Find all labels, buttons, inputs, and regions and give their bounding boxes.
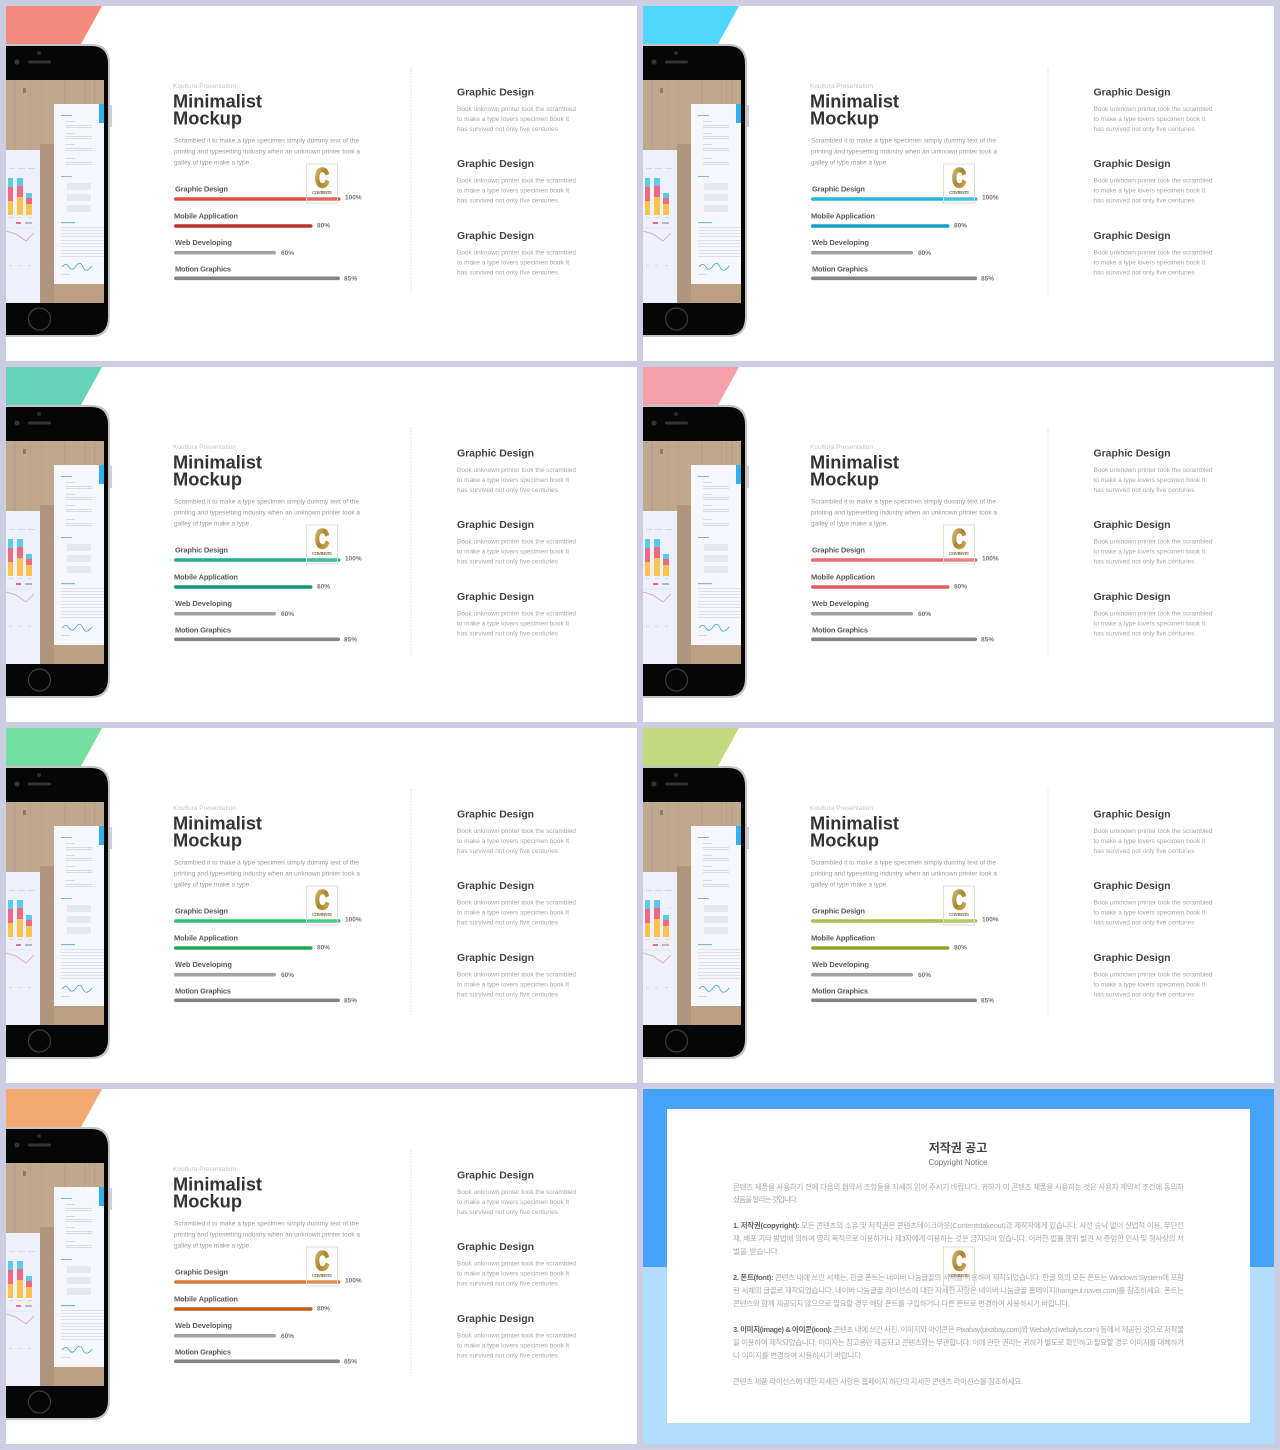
feature list: to make a type lovers specimen book It [457, 910, 569, 916]
watermark badge: C [315, 885, 329, 915]
watermark badge: CONTENTS [949, 551, 969, 556]
heading block: Mockup [173, 470, 242, 490]
notice body: 1. 저작권(copyright): 모든 콘텐츠의 소유 및 저작권은 콘텐츠테이크아웃(Contentstakeout)과 제작자에게 있습니다. 사전 승낙 없이 상업적 이용, 무단전 [733, 1220, 1184, 1230]
skill bars: 100% [345, 556, 362, 563]
intro paragraph: Scrambled it to make a type specimen simply dummy text of the [174, 860, 359, 867]
heading block [173, 1166, 262, 1212]
feature list: has survived not only five centuries [1094, 920, 1195, 926]
skill bars: 60% [918, 972, 931, 979]
heading block: Mockup [173, 1192, 242, 1212]
skill bars: 100% [982, 195, 999, 202]
divider [410, 67, 412, 293]
feature list: Book unknown printer took the scrambled [457, 900, 576, 906]
watermark badge [944, 163, 974, 203]
watermark badge: CONTENTS [312, 551, 332, 556]
feature list: Graphic Design [457, 808, 534, 820]
intro paragraph: printing and typesetting industry when an unknown printer took a [174, 149, 360, 156]
skill bars: Mobile Application [174, 211, 238, 220]
feature list [457, 86, 576, 276]
watermark badge: CONTENTS [312, 190, 332, 195]
skill bars: 80% [954, 223, 967, 230]
intro paragraph [811, 138, 997, 167]
watermark badge: CONTENTS [312, 912, 332, 917]
watermark badge: C [315, 163, 329, 193]
feature list: Book unknown printer took the scrambled [457, 972, 576, 978]
heading block: Koultura Presentation [173, 83, 236, 90]
panel: teal mockup slide [6, 367, 637, 722]
feature list: has survived not only five centuries [457, 487, 559, 494]
skill bars: Graphic Design [175, 1268, 228, 1277]
skill bars: Mobile Application [811, 933, 875, 942]
watermark badge [306, 885, 338, 925]
intro paragraph: galley of type make a type. [811, 521, 888, 528]
white notice card [667, 1109, 1250, 1423]
corner accent: lime [643, 728, 739, 766]
feature list: Book unknown printer took the scrambled [457, 1260, 576, 1268]
skill bars [174, 185, 362, 282]
intro paragraph [811, 860, 997, 889]
feature list: to make a type lovers specimen book It [457, 982, 569, 988]
divider [410, 428, 412, 654]
feature list: Graphic Design [457, 591, 534, 603]
feature list: has survived not only five centuries [1094, 848, 1195, 855]
feature list: Book unknown printer took the scrambled [457, 467, 576, 474]
feature list: Graphic Design [457, 86, 534, 98]
notice body: 3. 이미지(image) & 아이콘(icon): 콘텐츠 내에 쓰인 사진, 이미지와 아이콘은 Pixabay(pixabay.com)와 Webalys(webalys.com) 등에서 제공된 것으로 저작물 [733, 1324, 1184, 1334]
skill bars: Motion Graphics [175, 626, 231, 635]
skill bars: 85% [981, 276, 994, 282]
panel: red mockup slide [6, 6, 637, 361]
feature list [1094, 808, 1213, 998]
heading block [173, 444, 262, 490]
skill bars: Web Developing [175, 960, 232, 969]
heading block [810, 444, 899, 490]
intro paragraph [174, 138, 360, 167]
skill bars: Web Developing [175, 1321, 232, 1330]
watermark badge: CONTENTS [312, 1273, 332, 1278]
divider [1047, 789, 1049, 1015]
heading block: Koultura Presentation [810, 83, 873, 90]
feature list: Graphic Design [457, 880, 534, 892]
feature list: to make a type lovers specimen book It [457, 1199, 569, 1206]
feature list: to make a type lovers specimen book It [457, 620, 569, 628]
intro paragraph: printing and typesetting industry when an unknown printer took a [811, 149, 997, 156]
skill bars: 85% [344, 1358, 357, 1366]
notice body: 나 이미지를 변경하여 사용하시기 바랍니다. [733, 1350, 863, 1360]
intro paragraph [174, 860, 360, 889]
feature list: Book unknown printer took the scrambled [1094, 828, 1213, 835]
intro paragraph [811, 499, 997, 528]
divider [410, 1150, 412, 1376]
skill bars: 100% [345, 917, 362, 924]
skill bars: Mobile Application [174, 933, 238, 942]
skill bars: Web Developing [812, 599, 869, 608]
skill bars: Motion Graphics [175, 1348, 231, 1357]
phone mockup [6, 405, 112, 698]
skill bars [174, 1268, 362, 1366]
skill bars [811, 185, 999, 282]
heading block: Koultura Presentation [173, 1166, 236, 1173]
skill bars: 80% [317, 945, 330, 952]
skill bars: Mobile Application [811, 211, 875, 220]
feature list: has survived not only five centuries [1094, 198, 1195, 204]
skill bars: 100% [345, 195, 362, 202]
feature list: to make a type lovers specimen book It [1094, 260, 1206, 266]
intro paragraph: printing and typesetting industry when an unknown printer took a [174, 871, 360, 878]
skill bars: Motion Graphics [812, 626, 868, 635]
feature list: Graphic Design [1094, 952, 1170, 964]
watermark badge: C [315, 1246, 329, 1276]
heading block: Mockup [810, 108, 879, 128]
corner accent: green [6, 728, 102, 766]
watermark badge [944, 1246, 974, 1286]
notice body: 을 이용하여 제작되었습니다. 이미지는 참고용만 제공되고 콘텐츠와는 무관합니다. 이에 관한 권리는 귀하가 별도로 확인하고 필요할 경우 이미지를 대체하거 [733, 1337, 1184, 1347]
divider [1047, 428, 1049, 654]
feature list: to make a type lovers specimen book It [457, 260, 569, 266]
feature list: has survived not only five centuries [1094, 126, 1195, 133]
intro paragraph: printing and typesetting industry when an unknown printer took a [174, 1232, 360, 1239]
feature list: Book unknown printer took the scrambled [457, 1332, 576, 1340]
skill bars: 60% [918, 611, 931, 618]
divider [410, 789, 412, 1015]
feature list: Graphic Design [1094, 447, 1170, 459]
feature list: to make a type lovers specimen book It [1094, 188, 1206, 194]
feature list: to make a type lovers specimen book It [457, 116, 569, 123]
skill bars: 100% [345, 1278, 362, 1285]
skill bars: Graphic Design [175, 546, 228, 555]
skill bars: 80% [317, 1306, 330, 1313]
feature list: Graphic Design [1094, 880, 1170, 892]
intro paragraph: Scrambled it to make a type specimen simply dummy text of the [174, 138, 359, 145]
skill bars: Mobile Application [174, 572, 238, 581]
watermark badge: CONTENTS [949, 190, 969, 195]
feature list: Book unknown printer took the scrambled [1094, 538, 1213, 546]
heading block: Mockup [810, 470, 879, 490]
skill bars: 85% [344, 998, 357, 1004]
feature list: to make a type lovers specimen book It [1094, 548, 1206, 556]
watermark badge: CONTENTS [949, 912, 969, 917]
feature list: has survived not only five centuries [457, 920, 559, 926]
feature list [1094, 447, 1213, 638]
feature list: to make a type lovers specimen book It [1094, 116, 1206, 123]
feature list: Graphic Design [457, 952, 534, 964]
notice title: Copyright Notice [928, 1158, 988, 1167]
feature list: Graphic Design [457, 230, 534, 242]
skill bars: 60% [281, 611, 294, 618]
feature list: Book unknown printer took the scrambled [1094, 972, 1213, 978]
corner accent: pink [643, 367, 739, 405]
skill bars: 60% [281, 250, 294, 257]
feature list: has survived not only five centuries [1094, 558, 1195, 566]
heading block: Koultura Presentation [810, 805, 873, 812]
heading block [173, 805, 262, 850]
skill bars: Mobile Application [174, 1294, 238, 1303]
feature list: has survived not only five centuries [457, 1352, 559, 1360]
feature list: to make a type lovers specimen book It [1094, 910, 1206, 916]
feature list: Graphic Design [457, 519, 534, 531]
feature list: to make a type lovers specimen book It [457, 1342, 569, 1350]
notice body [733, 1182, 1184, 1386]
heading block: Minimalist [173, 452, 262, 472]
intro paragraph: Scrambled it to make a type specimen simply dummy text of the [811, 499, 996, 506]
watermark badge: C [315, 524, 329, 554]
feature list: Graphic Design [457, 1169, 534, 1181]
heading block: Mockup [810, 830, 879, 850]
intro paragraph: galley of type make a type. [174, 1243, 251, 1250]
intro paragraph: Scrambled it to make a type specimen simply dummy text of the [811, 138, 996, 145]
watermark badge [944, 885, 974, 925]
intro paragraph: galley of type make a type. [174, 521, 251, 528]
feature list: Book unknown printer took the scrambled [1094, 467, 1213, 474]
feature list: Book unknown printer took the scrambled [1094, 106, 1213, 113]
notice body: 2. 폰트(font): 콘텐츠 내에 쓰인 서체는, 한글 폰트는 네이버 나눔글꼴의 서체를 사용하여 제작되었습니다. 한글 외의 모든 폰트는 Windows System에 포함 [733, 1272, 1184, 1282]
heading block: Koultura Presentation [810, 444, 873, 451]
intro paragraph: Scrambled it to make a type specimen simply dummy text of the [811, 860, 996, 867]
feature list: has survived not only five centuries [457, 270, 559, 276]
panel: orange mockup slide [6, 1089, 637, 1444]
watermark badge [306, 524, 338, 564]
feature list: to make a type lovers specimen book It [457, 477, 569, 484]
skill bars [811, 907, 999, 1004]
watermark badge [306, 1246, 338, 1286]
skill bars [174, 546, 362, 644]
feature list: to make a type lovers specimen book It [1094, 620, 1206, 628]
watermark badge: CONTENTS [949, 1273, 969, 1278]
feature list: Graphic Design [457, 447, 534, 459]
feature list: has survived not only five centuries [457, 126, 559, 133]
skill bars [174, 907, 362, 1004]
notice body: 셨음을 알리는 것입니다. [733, 1194, 798, 1204]
skill bars: Web Developing [812, 238, 869, 247]
phone mockup [643, 766, 749, 1059]
intro paragraph: printing and typesetting industry when an unknown printer took a [811, 871, 997, 878]
skill bars: Motion Graphics [175, 987, 231, 996]
skill bars: 85% [344, 276, 357, 282]
feature list: has survived not only five centuries [457, 1280, 559, 1288]
skill bars: 100% [982, 917, 999, 924]
intro paragraph: galley of type make a type. [811, 882, 888, 889]
corner accent: cyan [643, 6, 739, 44]
feature list: has survived not only five centuries [1094, 992, 1195, 998]
notice title: 저작권 공고 [929, 1140, 987, 1155]
skill bars: 80% [954, 584, 967, 591]
feature list: Graphic Design [457, 1313, 534, 1325]
feature list [457, 447, 576, 638]
heading block [810, 805, 899, 850]
corner accent: orange [6, 1089, 102, 1127]
skill bars: 60% [918, 250, 931, 257]
skill bars: 80% [317, 584, 330, 591]
feature list: Graphic Design [457, 158, 534, 170]
watermark badge: C [952, 163, 966, 193]
phone mockup [643, 405, 749, 698]
panel: pink mockup slide [643, 367, 1274, 722]
heading block: Koultura Presentation [173, 444, 236, 451]
heading block: Minimalist [810, 92, 899, 112]
feature list: to make a type lovers specimen book It [1094, 838, 1206, 845]
skill bars: Motion Graphics [175, 265, 231, 274]
skill bars: 85% [981, 998, 994, 1004]
feature list: has survived not only five centuries [457, 1209, 559, 1216]
skill bars: 80% [954, 945, 967, 952]
skill bars [811, 546, 999, 644]
feature list: to make a type lovers specimen book It [457, 1270, 569, 1278]
skill bars: 60% [281, 972, 294, 979]
watermark badge: C [952, 524, 966, 554]
corner accent: red [6, 6, 102, 44]
heading block: Minimalist [810, 452, 899, 472]
feature list: has survived not only five centuries [457, 630, 559, 638]
intro paragraph [174, 1221, 360, 1250]
panel: green mockup slide [6, 728, 637, 1083]
feature list: has survived not only five centuries [1094, 630, 1195, 638]
skill bars: 60% [281, 1333, 294, 1340]
feature list [1094, 86, 1213, 276]
feature list: Book unknown printer took the scrambled [457, 106, 576, 113]
notice body: 콘텐츠 제품을 사용하기 전에 다음의 협약서 조항들을 자세히 읽어 주시기 바랍니다. 귀하가 이 콘텐츠 제품을 사용하는 것은 사용자 계약서 조건에 동의하 [733, 1182, 1184, 1192]
feature list: to make a type lovers specimen book It [457, 548, 569, 556]
watermark badge [944, 524, 974, 564]
phone mockup [643, 44, 749, 337]
skill bars: Graphic Design [812, 546, 865, 555]
feature list: has survived not only five centuries [457, 848, 559, 855]
feature list: Book unknown printer took the scrambled [457, 828, 576, 835]
skill bars: Graphic Design [812, 185, 865, 194]
watermark badge: C [952, 1246, 966, 1276]
heading block: Minimalist [173, 814, 262, 834]
divider [1047, 67, 1049, 293]
phone mockup [6, 766, 112, 1059]
panel: copyright notice [643, 1089, 1274, 1444]
intro paragraph: galley of type make a type. [174, 160, 251, 167]
intro paragraph: galley of type make a type. [174, 882, 251, 889]
intro paragraph: Scrambled it to make a type specimen simply dummy text of the [174, 499, 359, 506]
heading block: Minimalist [173, 92, 262, 112]
feature list: Book unknown printer took the scrambled [457, 250, 576, 256]
skill bars: Graphic Design [175, 907, 228, 916]
feature list: Graphic Design [457, 1241, 534, 1253]
intro paragraph: galley of type make a type. [811, 160, 888, 167]
feature list: Book unknown printer took the scrambled [457, 610, 576, 618]
heading block: Mockup [173, 108, 242, 128]
watermark badge [306, 163, 338, 203]
feature list: Book unknown printer took the scrambled [1094, 610, 1213, 618]
heading block: Minimalist [810, 814, 899, 834]
feature list: Graphic Design [1094, 808, 1170, 820]
skill bars: Mobile Application [811, 572, 875, 581]
feature list: Graphic Design [1094, 158, 1170, 170]
skill bars: 80% [317, 223, 330, 230]
feature list: to make a type lovers specimen book It [457, 838, 569, 845]
feature list: Book unknown printer took the scrambled [457, 538, 576, 546]
feature list: to make a type lovers specimen book It [1094, 477, 1206, 484]
feature list: Book unknown printer took the scrambled [1094, 250, 1213, 256]
panel: cyan mockup slide [643, 6, 1274, 361]
panel: lime mockup slide [643, 728, 1274, 1083]
corner accent: teal [6, 367, 102, 405]
feature list: to make a type lovers specimen book It [457, 188, 569, 194]
heading block [173, 83, 262, 128]
feature list: Graphic Design [1094, 591, 1170, 603]
heading block [810, 83, 899, 128]
skill bars: 85% [344, 636, 357, 644]
skill bars: Web Developing [175, 599, 232, 608]
skill bars: Motion Graphics [812, 265, 868, 274]
phone mockup [6, 44, 112, 337]
feature list: Graphic Design [1094, 230, 1170, 242]
skill bars: Graphic Design [812, 907, 865, 916]
feature list [457, 808, 576, 998]
intro paragraph: Scrambled it to make a type specimen simply dummy text of the [174, 1221, 359, 1228]
intro paragraph: printing and typesetting industry when an unknown printer took a [174, 510, 360, 517]
feature list: Book unknown printer took the scrambled [457, 1189, 576, 1196]
skill bars: Web Developing [175, 238, 232, 247]
feature list: Book unknown printer took the scrambled [1094, 900, 1213, 906]
feature list [457, 1169, 576, 1360]
heading block: Koultura Presentation [173, 805, 236, 812]
notice body: 콘텐츠 제품 라이선스에 대한 자세한 사항은 홈페이지 하단의 자세한 콘텐츠 라이선스를 참조하세요. [733, 1376, 1023, 1386]
notice body: 벌을 받습니다. [733, 1246, 780, 1256]
skill bars: 85% [981, 636, 994, 644]
notice body: 콘텐츠와 함께 제공되지 않으므로 필요할 경우 해당 폰트를 구입하거나 다른 폰트로 변경하여 사용하시기 바랍니다. [733, 1298, 1070, 1308]
feature list: has survived not only five centuries [457, 198, 559, 204]
intro paragraph: printing and typesetting industry when an unknown printer took a [811, 510, 997, 517]
phone mockup [6, 1127, 112, 1420]
feature list: has survived not only five centuries [457, 558, 559, 566]
feature list: Book unknown printer took the scrambled [1094, 178, 1213, 184]
notice body: 된 서체의 글꼴로 제작되었습니다. 네이버 나눔글꼴 라이선스에 대한 자세한 사항은 네이버 나눔글꼴 홈페이지(hangeul.naver.com)를 참조하세요. 폰트는 [733, 1285, 1184, 1295]
feature list: Book unknown printer took the scrambled [457, 178, 576, 184]
feature list: Graphic Design [1094, 519, 1170, 531]
notice body: 재, 배포 기타 방법에 의하여 영리 목적으로 이용하거나 제3자에게 이용하는 것은 금지되어 있습니다. 이러한 법률 행위 발견 시 준엄한 민사 및 형사상의 처 [733, 1233, 1184, 1243]
skill bars: Motion Graphics [812, 987, 868, 996]
heading block: Minimalist [173, 1174, 262, 1194]
feature list: to make a type lovers specimen book It [1094, 982, 1206, 988]
feature list: has survived not only five centuries [1094, 487, 1195, 494]
notice title [928, 1140, 988, 1167]
heading block: Mockup [173, 830, 242, 850]
feature list: has survived not only five centuries [1094, 270, 1195, 276]
feature list: has survived not only five centuries [457, 992, 559, 998]
watermark badge: C [952, 885, 966, 915]
intro paragraph [174, 499, 360, 528]
feature list: Graphic Design [1094, 86, 1170, 98]
skill bars: Web Developing [812, 960, 869, 969]
skill bars: Graphic Design [175, 185, 228, 194]
skill bars: 100% [982, 556, 999, 563]
